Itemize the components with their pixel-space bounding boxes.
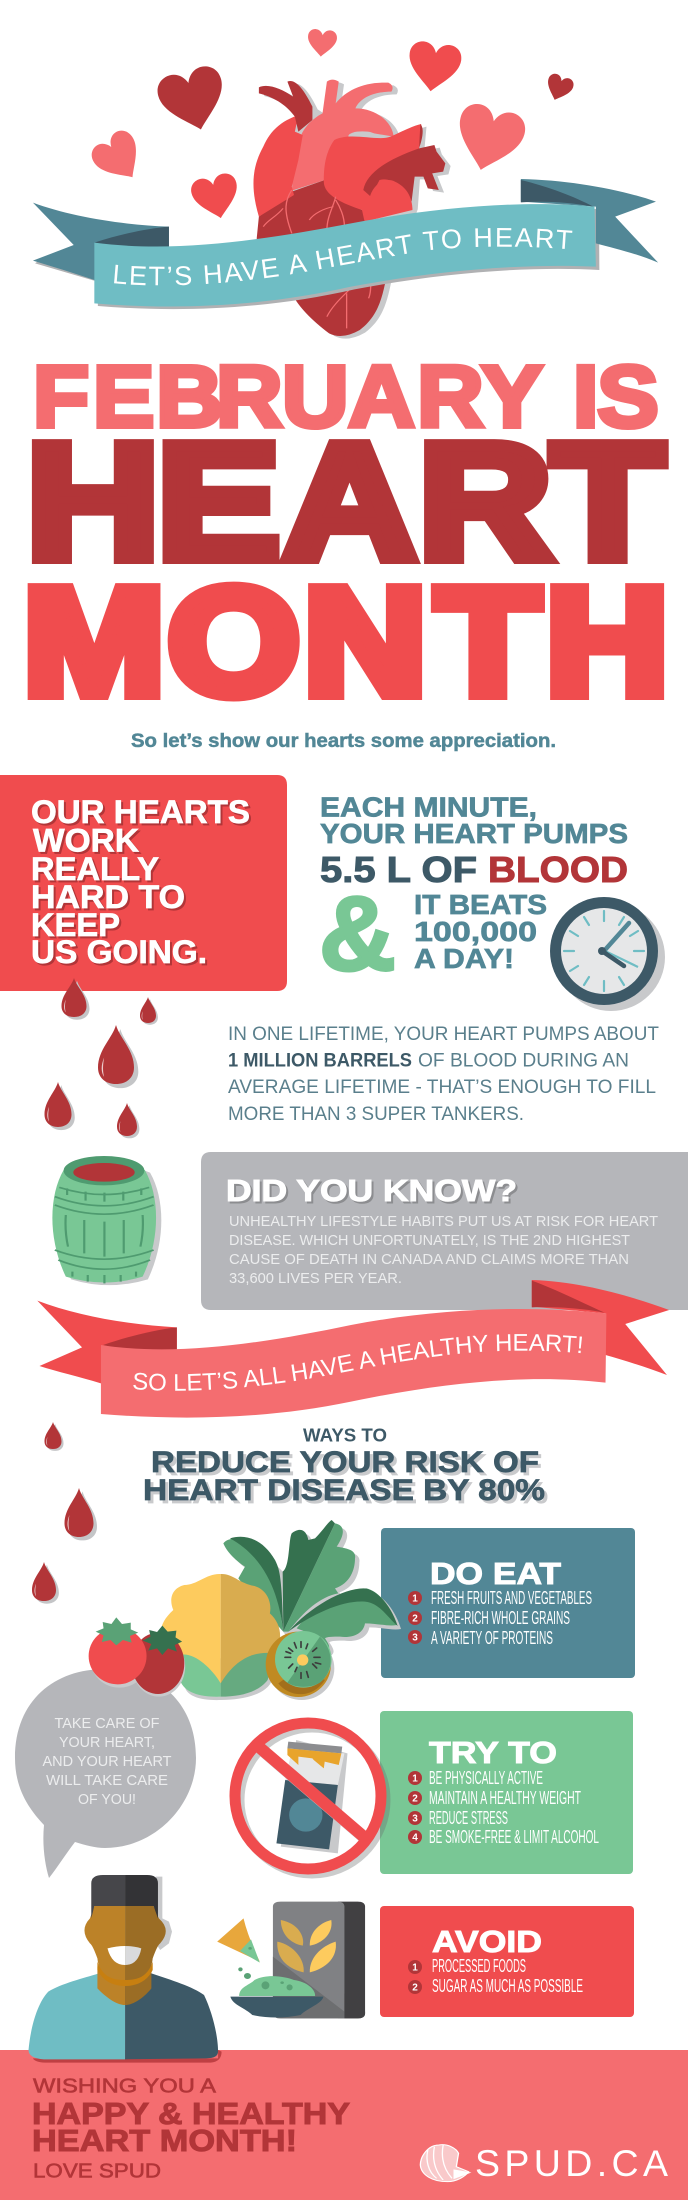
panel body: 33,600 LIVES PER YEAR. (229, 1270, 402, 1287)
leaves (223, 1520, 401, 1656)
list: 2 (412, 1982, 418, 1994)
list: 1 (412, 1962, 418, 1974)
panel headline: OUR HEARTS (31, 794, 250, 830)
list (408, 1588, 592, 1648)
list: 3 (412, 1632, 418, 1644)
panel body: DISEASE. WHICH UNFORTUNATELY, IS THE 2ND HIGHEST (229, 1232, 630, 1249)
panel headline: WORK (33, 822, 139, 858)
stat: 5.5 L of blood: 5.5 L OF (320, 849, 477, 890)
list: 2 (412, 1794, 418, 1804)
bubble text: TAKE CARE OF (54, 1716, 160, 1732)
list: BE PHYSICALLY ACTIVE (429, 1768, 543, 1788)
ribbon: let's have a heart to heart (33, 179, 658, 310)
icon: floating hearts (87, 28, 575, 223)
list: 1 (412, 1774, 418, 1784)
panel: avoid (380, 1906, 634, 2017)
heading: reduce your risk (143, 1446, 545, 1507)
logo: spud.ca (420, 2142, 668, 2184)
stat: it beats 100,000 a day: A DAY! (414, 943, 514, 974)
icon: anatomical heart (253, 80, 451, 339)
text block: one lifetime: MORE THAN 3 SUPER TANKERS. (228, 1104, 524, 1125)
heading: reduce your risk: REDUCE YOUR RISK OF (151, 1446, 539, 1479)
stat: 5.5 L of blood: BLOOD (488, 849, 628, 890)
stat: each minute your heart pumps: YOUR HEART PUMPS (320, 818, 628, 849)
title line: Heart: HEART (26, 410, 664, 593)
panel: do eat (381, 1528, 635, 1678)
panel body: CAUSE OF DEATH IN CANADA AND CLAIMS MORE THAN (229, 1251, 629, 1268)
icon: smiling person (29, 1875, 222, 2063)
panel heading: DO EAT (430, 1556, 561, 1591)
text block: one lifetime: AVERAGE LIFETIME - THAT’S ENOUGH TO FILL (228, 1077, 656, 1098)
icon: clock (550, 897, 665, 1011)
subtitle: So let’s show our hearts some appreciation. (131, 730, 556, 752)
line: happy and healthy heart month (32, 2096, 350, 2158)
ribbon text: SO LET’S ALL HAVE A HEALTHY HEART! (133, 1334, 582, 1391)
line: happy and healthy heart month: HEART MONTH! (32, 2123, 297, 2158)
stat: each minute your heart pumps (320, 792, 628, 849)
panel heading: DID YOU KNOW? (226, 1173, 517, 1208)
stat: 5.5 L of blood (320, 849, 628, 890)
list: A VARIETY OF PROTEINS (431, 1628, 553, 1648)
wordmark: SPUD.CA (475, 2142, 668, 2184)
panel body: UNHEALTHY LIFESTYLE HABITS PUT US AT RISK FOR HEART (229, 1213, 658, 1230)
list: REDUCE STRESS (429, 1808, 508, 1828)
ribbon: so let's all have a healthy heart (37, 1280, 669, 1418)
heading: reduce your risk: HEART DISEASE BY 80% (143, 1474, 545, 1507)
icon: apple (420, 2145, 469, 2182)
panel: did you know (201, 1152, 688, 1310)
list: PROCESSED FOODS (432, 1956, 526, 1976)
list (408, 1956, 583, 1996)
stat: it beats 100,000 a day (414, 889, 547, 974)
bubble text: OF YOU! (78, 1792, 136, 1808)
panel headline: KEEP (31, 907, 120, 943)
panel headline: US GOING. (31, 934, 207, 970)
list: 1 (412, 1594, 418, 1604)
text block: one lifetime (228, 1024, 659, 1125)
list: 4 (412, 1832, 418, 1844)
hero illustration: hearts, anatomical heart and ribbon (33, 29, 658, 339)
stat: it beats 100,000 a day: IT BEATS (414, 889, 547, 920)
list (408, 1768, 599, 1847)
line: wishing you a: WISHING YOU A (33, 2076, 217, 2098)
icon: processed food (217, 1902, 365, 2018)
heading: ways to: WAYS TO (303, 1426, 387, 1446)
ampersand: & (319, 875, 396, 993)
icon: blood drops (32, 978, 158, 1604)
icon: barrel (52, 1156, 161, 1285)
bowl (230, 1976, 323, 2017)
speech bubble (15, 1669, 196, 1878)
strawberries (89, 1617, 185, 1697)
text block: one lifetime: 1 MILLION BARRELS (228, 1050, 412, 1072)
list: 3 (412, 1814, 418, 1824)
list: 2 (412, 1614, 418, 1624)
footer band (0, 2050, 688, 2200)
cauliflower (161, 1574, 280, 1700)
line: happy and healthy heart month: HAPPY & HEALTHY (32, 2096, 350, 2131)
text block: one lifetime: OF BLOOD DURING AN (418, 1050, 629, 1072)
bubble text: WILL TAKE CARE (46, 1773, 168, 1789)
panel heading: AVOID (432, 1924, 542, 1959)
stat: it beats 100,000 a day: 100,000 (414, 916, 537, 947)
ribbon text: LET’S HAVE A HEART TO HEART (114, 228, 572, 286)
panel body (229, 1213, 658, 1287)
panel headline (31, 794, 250, 970)
line: love spud: LOVE SPUD (33, 2160, 161, 2182)
bubble text (42, 1716, 172, 1808)
panel: try to (380, 1711, 633, 1874)
bubble text: AND YOUR HEART (42, 1754, 172, 1770)
footer message (32, 2076, 350, 2182)
icon: fruit and vegetables (89, 1520, 401, 1700)
text block: one lifetime: IN ONE LIFETIME, YOUR HEART PUMPS ABOUT (228, 1024, 659, 1045)
title line: February is: FEBRUARY IS (33, 348, 659, 445)
panel heading: TRY TO (429, 1735, 557, 1770)
bubble text: YOUR HEART, (59, 1735, 155, 1751)
list: MAINTAIN A HEALTHY WEIGHT (429, 1788, 581, 1808)
kiwi (266, 1631, 334, 1700)
icon: no smoking (235, 1723, 385, 1873)
nacho chip (217, 1918, 260, 1979)
cereal box (273, 1902, 365, 2018)
stat: each minute your heart pumps: EACH MINUTE, (320, 792, 537, 822)
panel headline: HARD TO (31, 879, 185, 915)
list: FIBRE-RICH WHOLE GRAINS (431, 1608, 570, 1628)
panel headline: REALLY (31, 851, 159, 887)
title line: Month: MONTH (24, 557, 668, 726)
panel: our hearts work really hard (0, 775, 287, 991)
title: February is Heart Month (24, 348, 668, 726)
